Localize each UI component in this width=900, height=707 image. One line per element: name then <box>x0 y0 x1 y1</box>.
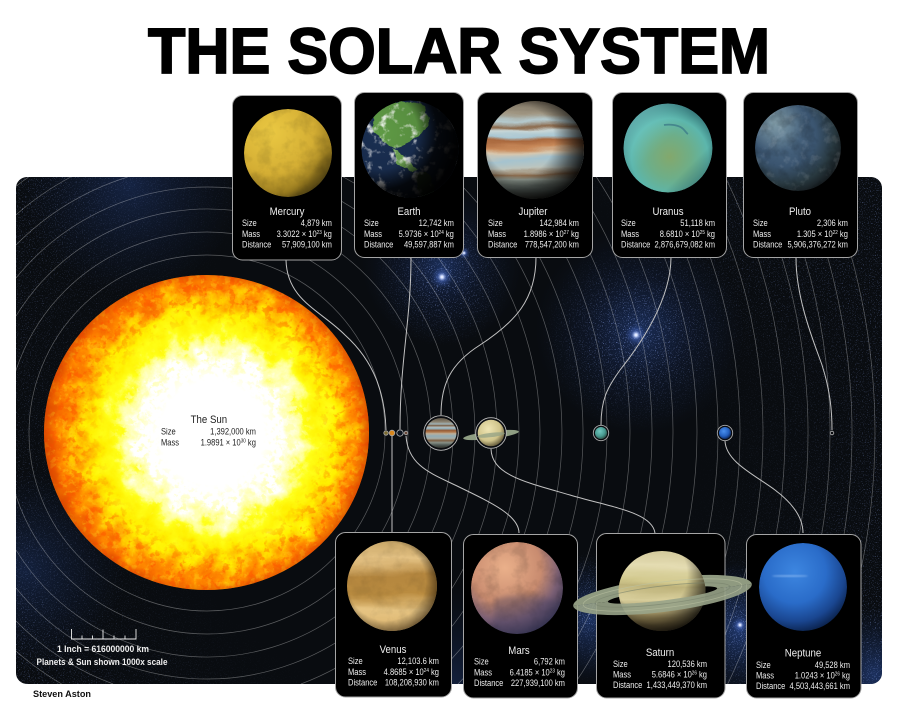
stats: Neptune: Neptune <box>785 647 821 660</box>
stats: Saturn: Saturn <box>646 646 674 659</box>
stats: Saturn: 1,433,449,370 km <box>647 679 707 690</box>
sun label: 1.9891 × 10 <box>201 437 241 448</box>
stats: Jupiter <box>488 205 579 250</box>
stats: Neptune: 1.0243 × 10 <box>795 670 835 681</box>
marker: Jupiter <box>424 416 458 450</box>
stats: Earth: Distance <box>364 239 394 250</box>
stats: Pluto: 5,906,376,272 km <box>787 239 848 250</box>
stats: Venus: Venus <box>380 643 406 656</box>
stats: Earth: 12,742 km <box>419 217 454 228</box>
planet: Mercury <box>244 109 332 197</box>
connector: Earth <box>400 258 411 429</box>
planet: Mars <box>471 542 563 640</box>
card: Neptune <box>746 534 861 698</box>
stats: Mercury: Mercury <box>270 205 305 218</box>
marker: Mercury <box>384 431 388 435</box>
stats: Mercury: 3.3022 × 10 <box>277 228 317 239</box>
stats: Jupiter: 142,984 km <box>540 217 579 228</box>
stats: Earth: kg <box>444 228 454 239</box>
stats: Jupiter: Distance <box>488 239 518 250</box>
marker: Uranus <box>593 425 609 441</box>
marker: Pluto <box>830 431 834 435</box>
stats: Venus: Distance <box>348 677 378 688</box>
orbit rings <box>6 177 875 684</box>
marker: Earth <box>397 430 403 436</box>
stats: Saturn <box>613 646 707 690</box>
panel: starfield background <box>6 177 882 684</box>
stats: Mars: Mars <box>508 644 530 657</box>
stats: Saturn: Size <box>613 658 628 669</box>
planet: Jupiter <box>486 101 584 199</box>
ring front <box>573 578 752 616</box>
stats: Pluto: 22 <box>833 230 838 236</box>
stats: Saturn: 26 <box>692 670 697 677</box>
stats: Earth: 5.9736 × 10 <box>399 228 439 239</box>
sun label: 1,392,000 km <box>210 426 256 437</box>
credit: Steven Aston <box>33 689 91 699</box>
stats: Jupiter: Size <box>488 217 503 228</box>
planet: Venus <box>347 541 437 631</box>
card: Venus <box>336 532 452 697</box>
stats: Mars: kg <box>555 667 565 678</box>
stats: Earth: Mass <box>364 228 382 239</box>
stats: Mars: 6,792 km <box>534 656 565 667</box>
stats: Mercury: Mass <box>242 228 260 239</box>
stats: Jupiter: 1.8986 × 10 <box>524 228 564 239</box>
planet: Saturn <box>573 551 752 631</box>
stats: Uranus: 25 <box>700 230 705 236</box>
planet: Pluto <box>755 105 841 191</box>
scale note: Planets & Sun shown 1000x scale <box>36 657 168 667</box>
sun label <box>161 413 256 448</box>
stats: Venus: 12,103.6 km <box>397 655 439 666</box>
stats: Neptune: Size <box>756 659 771 670</box>
orbit row: scale planets <box>384 416 834 450</box>
stats: Earth: 24 <box>439 230 444 236</box>
marker: Mars <box>404 431 408 435</box>
stats: Mars: Distance <box>474 677 504 688</box>
planet: Uranus <box>624 104 712 192</box>
stats: Mars <box>474 644 565 688</box>
stats: Saturn: 5.6846 × 10 <box>652 669 692 680</box>
stats: Earth: Earth <box>397 205 421 218</box>
sun label: kg <box>246 437 256 448</box>
stats: Uranus: Uranus <box>652 205 684 218</box>
stats: Saturn: kg <box>697 669 707 680</box>
sun label: The Sun <box>191 413 227 426</box>
card: Saturn <box>571 534 754 698</box>
connector: Neptune <box>725 441 803 533</box>
stats: Jupiter: Mass <box>488 228 506 239</box>
stats: Mercury: 57,909,100 km <box>282 239 332 250</box>
stats: Pluto: Distance <box>753 239 783 250</box>
stats: Saturn: Mass <box>613 669 631 680</box>
sun <box>44 275 369 590</box>
stats: Neptune: 4,503,443,661 km <box>790 680 850 691</box>
connector: Uranus <box>601 257 671 425</box>
stats: Jupiter: 27 <box>564 230 569 236</box>
stats: Mercury: Distance <box>242 239 272 250</box>
stats: Pluto: 2,306 km <box>817 217 848 228</box>
card: Mars <box>464 534 578 698</box>
stats: Venus: Size <box>348 655 363 666</box>
stats: Uranus: 2,876,679,082 km <box>655 239 715 250</box>
stats: Uranus: 8.6810 × 10 <box>660 228 700 239</box>
stats: Mars: Size <box>474 656 489 667</box>
stats: Neptune: Distance <box>756 680 786 691</box>
stats: Mars: 23 <box>550 668 555 675</box>
card: Mercury <box>232 96 342 260</box>
stats: Venus: kg <box>429 666 439 677</box>
stats: Mercury: 23 <box>317 230 322 236</box>
stats: Mars: 6.4185 × 10 <box>510 667 550 678</box>
stats: Earth: Size <box>364 217 379 228</box>
stats: Pluto: Mass <box>753 228 771 239</box>
connector: Pluto <box>796 258 832 430</box>
scale bar <box>36 629 168 667</box>
connector: Mercury <box>286 260 386 430</box>
connector: Venus <box>391 436 393 533</box>
planet: Neptune <box>759 543 847 631</box>
sun label: Size <box>161 426 176 437</box>
stats: Uranus: kg <box>705 228 715 239</box>
stats: Jupiter: Jupiter <box>519 205 548 218</box>
planet: Earth <box>361 100 459 198</box>
stats: Venus <box>348 643 439 688</box>
marker: Venus <box>389 430 395 436</box>
stats: Mercury: kg <box>322 228 332 239</box>
globe <box>618 551 706 631</box>
connector: Mars <box>406 436 519 533</box>
stats: Saturn: 120,536 km <box>668 658 707 669</box>
stats: Pluto: 1.305 × 10 <box>797 228 833 239</box>
stats: Neptune <box>756 647 850 691</box>
sun label: Mass <box>161 437 179 448</box>
marker: Saturn <box>463 418 519 448</box>
stats: Neptune: kg <box>840 670 850 681</box>
connector: Saturn <box>491 449 655 533</box>
card: Uranus <box>612 92 726 258</box>
stats: Saturn: Distance <box>613 679 643 690</box>
stats: Earth: 49,597,887 km <box>404 239 454 250</box>
card: Earth <box>354 92 464 258</box>
stats: Jupiter: kg <box>569 228 579 239</box>
sun label: 30 <box>241 438 246 445</box>
card: Pluto <box>744 92 858 258</box>
stats: Uranus <box>621 205 715 250</box>
stats: Mars: Mass <box>474 667 492 678</box>
stats: Pluto: kg <box>838 228 848 239</box>
stats: Mercury <box>242 205 332 250</box>
stats: Uranus: Mass <box>621 228 639 239</box>
stats: Uranus: Distance <box>621 239 651 250</box>
card: Jupiter <box>477 92 593 258</box>
stats: Uranus: Size <box>621 217 636 228</box>
stats: Mercury: Size <box>242 217 257 228</box>
ring back <box>573 574 752 606</box>
stats: Mars: 227,939,100 km <box>511 677 565 688</box>
stats: Earth <box>364 205 454 250</box>
stats: Neptune: 26 <box>835 671 840 678</box>
scale text: 1 Inch = 616000000 km <box>57 644 149 654</box>
stats: Venus: Mass <box>348 666 366 677</box>
ruler <box>72 629 136 639</box>
stats: Venus: 4.8685 × 10 <box>384 666 424 677</box>
stats: Pluto <box>753 205 848 250</box>
title: THE SOLAR SYSTEM <box>148 15 770 87</box>
marker: Neptune <box>717 425 733 441</box>
stats: Venus: 108,208,930 km <box>385 677 439 688</box>
stats: Neptune: 49,528 km <box>815 659 850 670</box>
connector: Jupiter <box>441 257 536 415</box>
stats: Pluto: Pluto <box>789 205 811 218</box>
stats: Pluto: Size <box>753 217 768 228</box>
stats: Venus: 24 <box>424 668 429 674</box>
stats: Neptune: Mass <box>756 670 774 681</box>
stats: Mercury: 4,879 km <box>301 217 332 228</box>
stats: Uranus: 51,118 km <box>680 217 715 228</box>
stats: Jupiter: 778,547,200 km <box>525 239 579 250</box>
